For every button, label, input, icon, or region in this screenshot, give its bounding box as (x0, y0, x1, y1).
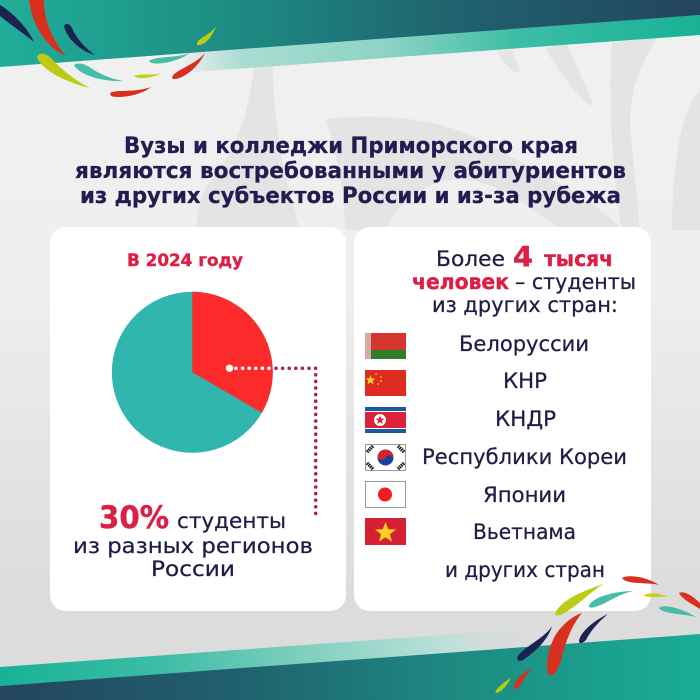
callout: 30 percent: России (151, 557, 235, 581)
list of countries: КНДР (495, 407, 556, 431)
bottom ornament: leaves (496, 576, 700, 693)
callout: 30 percent: из разных регионов (73, 534, 313, 558)
title: являются востребованными у абитуриентов (75, 159, 626, 184)
icon: flag of Japan (366, 482, 406, 508)
panel: pie chart card (50, 227, 346, 611)
heading: more than 4 thousand: Более (436, 247, 505, 271)
pie chart (112, 292, 273, 453)
top banner (0, 0, 700, 73)
top ornament: leaves (0, 0, 216, 97)
list of countries: Вьетнама (473, 520, 576, 544)
icon: flag of China (365, 370, 406, 396)
list of countries: Белоруссии (459, 332, 589, 356)
panel heading: year: В 2024 году (127, 251, 243, 271)
heading: more than 4 thousand: 4 (513, 240, 533, 273)
heading: more than 4 thousand: из других стран: (432, 293, 618, 317)
list of countries: и других стран (445, 558, 605, 582)
dotted leader line (226, 365, 316, 517)
heading: more than 4 thousand: человек (412, 270, 509, 294)
heading: more than 4 thousand: – студенты (515, 270, 636, 294)
title: Вузы и колледжи Приморского края (124, 134, 578, 159)
background watermark pattern (196, 38, 700, 230)
icon: flag of North Korea (365, 407, 406, 433)
callout: 30 percent (73, 500, 313, 581)
heading: more than 4 thousand (412, 240, 636, 317)
callout: 30 percent: студенты (177, 509, 286, 533)
list of countries (422, 332, 627, 582)
callout: 30 percent: 30% (99, 500, 169, 536)
title (75, 134, 626, 209)
title: из других субъектов России и из-за рубежа (80, 184, 621, 209)
icon: flag of Belarus (365, 333, 406, 359)
list of countries: Японии (483, 483, 566, 507)
icon: flag of South Korea (366, 444, 406, 470)
list of countries: Республики Кореи (422, 445, 627, 469)
list of countries: КНР (503, 369, 547, 393)
panel: foreign students card (354, 227, 651, 611)
icon: flag of Vietnam (365, 518, 406, 545)
heading: more than 4 thousand: тысяч (544, 247, 613, 271)
bottom banner (0, 628, 700, 700)
